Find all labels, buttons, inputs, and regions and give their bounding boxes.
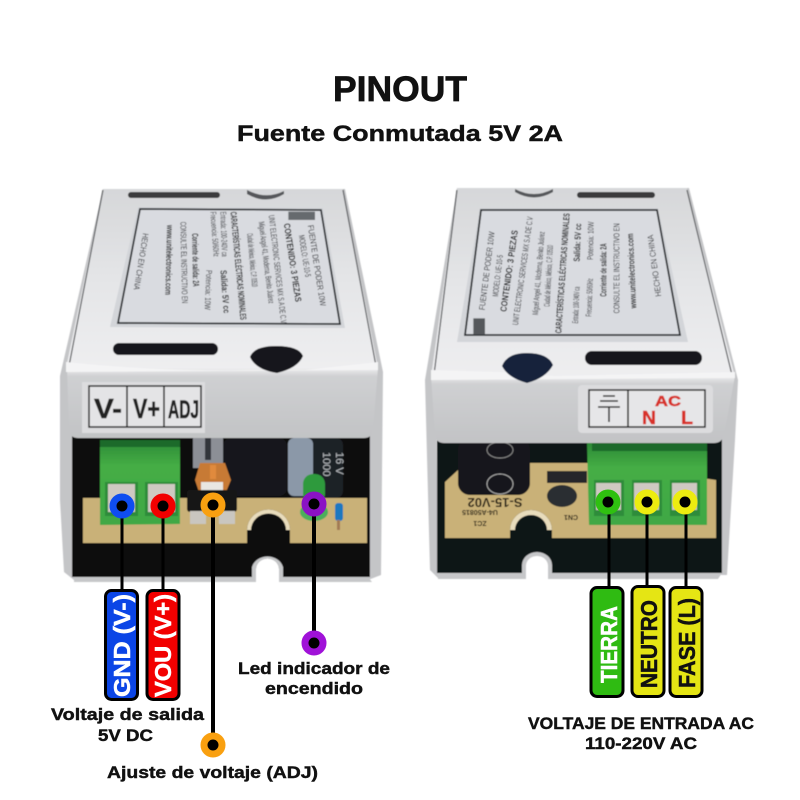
right device side flanges	[425, 188, 738, 578]
right device top plate	[431, 188, 735, 377]
left device sticker: Ciudad de México, México, C.P. 03510	[245, 233, 260, 287]
right device sticker: Entrada: 100-240V ca	[570, 286, 582, 324]
left device capacitors: 16 V	[333, 452, 345, 475]
label: Voltaje de salida 5V DC: Voltaje de salida	[51, 705, 205, 724]
pill: TIERRA: TIERRA	[596, 606, 622, 683]
label: Voltaje de entrada AC: VOLTAJE DE ENTRADA AC	[528, 714, 754, 733]
left device terminal legend plate	[82, 382, 205, 433]
right device terminal legend plate: AC	[655, 393, 681, 410]
right device slots and hole	[502, 189, 702, 383]
left device sticker	[110, 207, 345, 328]
left device sticker: FUENTE DE PODER 10W	[306, 224, 328, 307]
left device sticker: Entrada: 100-240V ca	[218, 211, 230, 257]
right device sticker	[457, 208, 688, 342]
left device LED	[300, 474, 343, 530]
pin marker: VOU line and dot	[154, 497, 172, 592]
left device sticker: HECHO EN CHINA	[132, 233, 151, 291]
right device sticker: www.unitelectronics.com	[625, 233, 638, 309]
left device capacitors	[193, 438, 345, 498]
right device sticker: UNIT ELECTRONIC SERVICES MX S.A DE C.V	[510, 216, 535, 326]
left device PCB	[83, 498, 367, 543]
right device sticker: CONSULTE EL INSTRUCTIVO EN	[612, 223, 622, 313]
label: Voltaje de entrada AC: 110-220V AC	[585, 734, 697, 753]
right device PCB silkscreen: U4-A50815	[462, 508, 498, 515]
pin marker: ADJ line and dots	[204, 496, 222, 754]
left device terminal legend plate: V-	[94, 393, 122, 424]
right device terminal legend plate	[578, 385, 713, 433]
left device sticker: CARACTERÍSTICAS ELÉCTRICAS NOMINALES	[228, 211, 249, 320]
left device front plate	[67, 368, 378, 438]
label: Led indicador de encendido: encendido	[265, 679, 363, 698]
label: Led indicador de encendido: Led indicador de	[238, 659, 390, 678]
left device potentiometer	[187, 463, 237, 524]
right device sticker: FUENTE DE PODER 10W	[477, 231, 497, 311]
right device PCB silkscreen: S-15-V02	[468, 495, 522, 510]
panel: left power supply (DC output side)	[60, 189, 383, 582]
left device green terminal block	[100, 440, 180, 525]
pin marker: GND line and dot	[113, 497, 131, 592]
left device sticker: Potencia: 10W	[203, 270, 214, 310]
label: Ajuste de voltaje (ADJ): Ajuste de voltaje (ADJ)	[107, 763, 318, 782]
right device PCB	[445, 463, 716, 538]
left device sticker: UNIT ELECTRONIC SERVICES MX S.A DE C.V	[267, 214, 289, 324]
right device capacitor and components	[458, 438, 587, 507]
panel: right power supply (AC input side)	[425, 188, 738, 579]
right device sticker: Corriente de salida: 2A	[598, 243, 608, 297]
left device sticker: CONTENIDO: 3 PIEZAS	[282, 223, 303, 303]
title: PINOUT	[333, 70, 467, 109]
left device sticker: www.unitelectronics.com	[163, 224, 175, 295]
right device PCB silkscreen: CN1	[564, 513, 578, 520]
left device sticker: Frecuencia: 50/60Hz	[208, 211, 222, 257]
right device front plate	[431, 376, 735, 443]
left device sticker: CONSULTE EL INSTRUCTIVO EN	[178, 222, 190, 303]
pill: TIERRA	[591, 588, 623, 696]
label: Led indicador de encendido	[238, 659, 390, 698]
right device sticker: Frecuencia: 50/60Hz	[583, 278, 595, 317]
left device bottom frame	[74, 556, 372, 582]
pill: GND (V-): GND (V-)	[109, 594, 135, 697]
pill: VOU (V+): VOU (V+)	[150, 594, 176, 697]
right device sticker: CONTENIDO: 3 PIEZAS	[498, 229, 520, 312]
left device sticker: MODELO: UE-10-5	[297, 234, 313, 278]
left device sticker: Salida: 5V cc	[218, 270, 232, 314]
right device sticker: Potencia: 10W	[585, 221, 596, 260]
pill: FASE (L): FASE (L)	[674, 598, 700, 688]
pin marker: TIERRA line and dot	[599, 493, 617, 588]
left device terminal legend plate: V+	[133, 393, 160, 424]
pill: NEUTRO: NEUTRO	[636, 600, 662, 688]
left device capacitors: 1000	[320, 452, 332, 476]
left device terminal legend plate: ADJ	[168, 396, 199, 424]
left device sticker: Miguel Angel 41, Moderna, Benito Juárez	[257, 221, 277, 304]
right device terminal legend plate: N	[642, 408, 656, 428]
right device bottom frame	[438, 552, 722, 579]
left device interior	[72, 430, 370, 577]
pin marker: NEUTRO line and dot	[638, 493, 656, 588]
right device interior	[437, 435, 722, 573]
left device sticker: Corriente de salida: 2A	[190, 233, 201, 287]
right device sticker: Salida: 5V cc	[572, 223, 583, 262]
right device sticker: CARACTERÍSTICAS ELÉCTRICAS NOMINALES	[552, 213, 572, 334]
right device sticker: Ciudad de México, México, C.P. 03510	[542, 245, 555, 307]
pin marker: FASE line and dot	[676, 493, 694, 588]
right device sticker: Miguel Angel 41, Moderna, Benito Juárez	[530, 231, 547, 315]
subtitle: Fuente Conmutada 5V 2A	[237, 121, 563, 146]
right device PCB silkscreen: ZC1	[473, 519, 487, 526]
pin marker: LED line and dots	[305, 495, 323, 652]
left device side flanges	[60, 189, 383, 580]
right device terminal legend plate: L	[681, 408, 693, 428]
right device sticker: MODELO: UE-10-5	[490, 254, 505, 297]
label: Voltaje de salida 5V DC	[51, 705, 205, 745]
right device green terminal block	[587, 443, 707, 525]
label: Voltaje de entrada AC	[528, 714, 754, 753]
right device PCB silkscreen	[462, 495, 578, 526]
label: Voltaje de salida 5V DC: 5V DC	[98, 726, 153, 745]
right device sticker: HECHO EN CHINA	[645, 234, 663, 297]
left device top plate	[66, 189, 378, 368]
left device slots and hole	[113, 190, 303, 373]
